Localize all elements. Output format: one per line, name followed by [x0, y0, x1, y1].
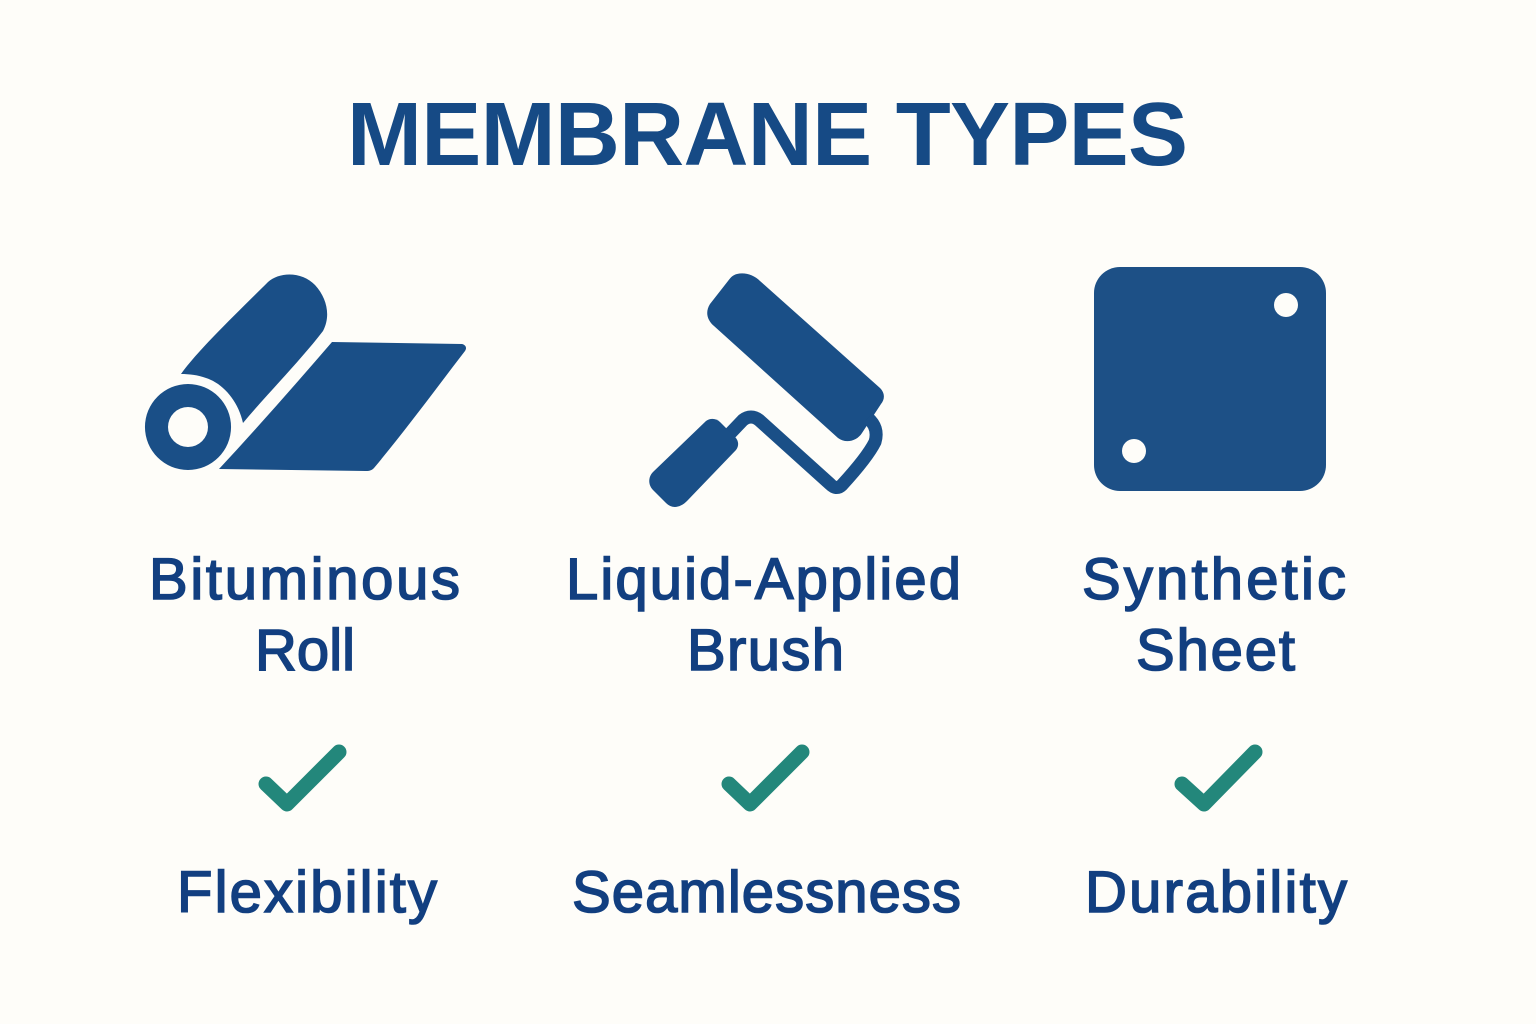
icon: liquid-applied paint roller [649, 273, 884, 507]
icon: synthetic sheet [1094, 267, 1326, 491]
label: Liquid-Applied Brush: Liquid-Applied [566, 547, 961, 612]
icon: check 3 [1182, 752, 1255, 804]
label: Liquid-Applied Brush: Brush [687, 618, 844, 683]
label: Flexibility: Flexibility [177, 860, 437, 925]
icon: bituminous roll [145, 274, 466, 471]
label: Durability: Durability [1085, 860, 1347, 925]
label: Synthetic Sheet: Sheet [1136, 618, 1295, 683]
label: Liquid-Applied Brush [566, 547, 961, 683]
label: Bituminous Roll [149, 547, 460, 683]
label: Synthetic Sheet: Synthetic [1082, 547, 1346, 612]
label: Synthetic Sheet [1082, 547, 1346, 683]
label: Seamlessness: Seamlessness [572, 860, 961, 925]
icon: check 2 [729, 752, 802, 804]
label: Bituminous Roll: Bituminous [149, 547, 460, 612]
icon: check 1 [266, 752, 339, 804]
title: MEMBRANE TYPES [347, 85, 1188, 185]
label: Bituminous Roll: Roll [255, 618, 355, 683]
